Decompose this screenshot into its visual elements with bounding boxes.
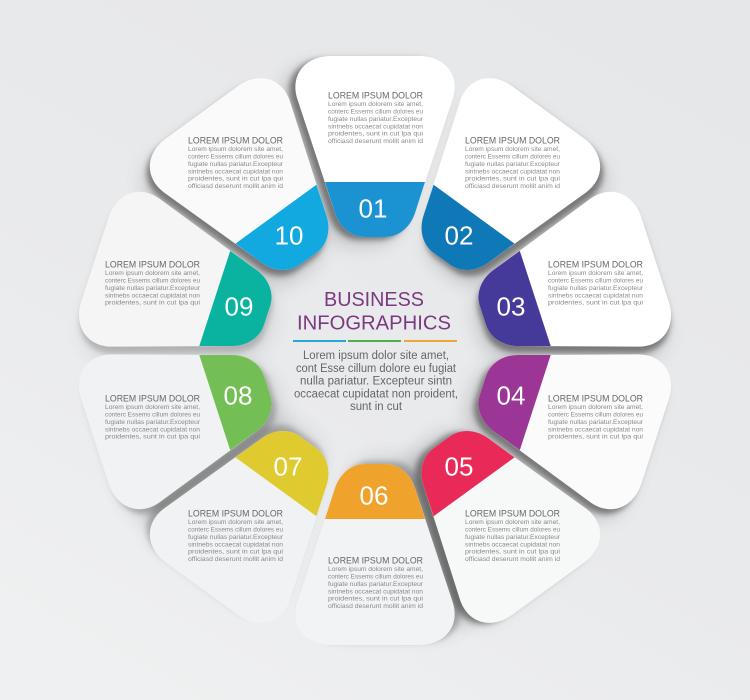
center paragraph: occaecat cupidatat non proident, [294, 388, 458, 400]
text block 05: Lorem ipsum dolorem site amet, [465, 519, 560, 526]
center paragraph [294, 350, 458, 413]
panel: step 01 [295, 56, 455, 237]
text block 07: Lorem ipsum dolorem site amet, [188, 519, 283, 526]
text block 06: sintnebs occaecat cupidatat non [328, 588, 423, 595]
petal 03 shape [458, 184, 680, 391]
text block 07: conterc Essems cillum dolores eu [188, 526, 283, 534]
number 02: 02 [445, 220, 473, 250]
text block 05: proidentes, sunt in cut lpa qui [465, 549, 561, 556]
text block 05: officiasd deserunt mollit anim id [465, 556, 560, 563]
text block 03: LOREM IPSUM DOLOR [548, 260, 643, 270]
text block 01: sintnebs occaecat cupidatat non [328, 123, 423, 130]
center paragraph: nulla pariatur. Excepteur sintn [300, 376, 452, 388]
text block 02: fugiate nullas pariatur.Excepteur [465, 161, 561, 168]
text block 06: officiasd deserunt mollit anim id [328, 603, 423, 610]
text block 05 [465, 508, 561, 563]
text block 01: conterc Essems cillum dolores eu [328, 108, 423, 116]
text block 09: Lorem ipsum dolorem site amet, [105, 270, 200, 277]
text block 04 [548, 394, 644, 441]
text block 08: Lorem ipsum dolorem site amet, [105, 404, 200, 411]
text block 04: proidentes, sunt in cut lpa qui [548, 434, 644, 441]
text block 05: conterc Essems cillum dolores eu [465, 526, 560, 534]
text block 01: Lorem ipsum dolorem site amet, [328, 101, 423, 108]
text block 06: proidentes, sunt in cut lpa qui [328, 596, 424, 603]
text block 06 [328, 556, 424, 610]
text block 10: proidentes, sunt in cut lpa qui [188, 176, 284, 183]
text block 06: LOREM IPSUM DOLOR [328, 556, 423, 566]
text block 09: conterc Essems cillum dolores eu [105, 278, 200, 284]
panel: step 08 [70, 310, 292, 517]
text block 09: proidentes, sunt in cut lpa qui [105, 300, 201, 307]
text block 05: fugiate nullas pariatur.Excepteur [465, 534, 561, 541]
petal 06 shape [295, 464, 455, 645]
panel: step 09 [70, 184, 292, 391]
panel: step 07 [137, 396, 373, 636]
petal 02 shape [377, 65, 613, 305]
text block 03: proidentes, sunt in cut lpa qui [548, 300, 644, 307]
text block 02: conterc Essems cillum dolores eu [465, 154, 560, 160]
text block 05: sintnebs occaecat cupidatat non [465, 541, 560, 548]
petal 01 shape [295, 56, 455, 237]
petal shadows [69, 59, 681, 642]
text block 10: LOREM IPSUM DOLOR [188, 136, 283, 146]
number 04: 04 [497, 380, 525, 410]
center title: INFOGRAPHICS [297, 312, 451, 334]
text block 02: LOREM IPSUM DOLOR [465, 136, 560, 146]
text block 02 [465, 136, 561, 190]
text block 09: sintnebs occaecat cupidatat non [105, 292, 200, 299]
text block 03 [548, 260, 644, 307]
text block 06: fugiate nullas pariatur.Excepteur [328, 581, 424, 588]
text block 04: conterc Essems cillum dolores eu [548, 412, 643, 418]
text block 04: LOREM IPSUM DOLOR [548, 394, 643, 404]
center title: BUSINESS [324, 288, 424, 311]
tri-colour divider [293, 340, 457, 342]
number 08: 08 [224, 380, 252, 410]
number 05: 05 [445, 452, 473, 482]
text block 10: sintnebs occaecat cupidatat non [188, 168, 283, 175]
text block 09: LOREM IPSUM DOLOR [105, 260, 200, 270]
petal 10 shape [137, 65, 373, 305]
petal 08 shape [70, 310, 292, 517]
number 06: 06 [360, 480, 388, 510]
text block 10 [188, 136, 284, 190]
text block 09 [105, 260, 201, 307]
text block 04: fugiate nullas pariatur.Excepteur [548, 419, 644, 426]
center title [297, 288, 451, 334]
text block 06: Lorem ipsum dolorem site amet, [328, 566, 423, 573]
text block 06: conterc Essems cillum dolores eu [328, 574, 423, 580]
number 07: 07 [274, 452, 302, 482]
text block 01 [328, 90, 424, 145]
number 09: 09 [225, 292, 253, 322]
text block 03: conterc Essems cillum dolores eu [548, 278, 643, 284]
text block 08: LOREM IPSUM DOLOR [105, 394, 200, 404]
text block 03: Lorem ipsum dolorem site amet, [548, 270, 643, 277]
center paragraph: Lorem ipsum dolor site amet, [303, 350, 449, 362]
text block 07: LOREM IPSUM DOLOR [188, 508, 283, 518]
text block 03: sintnebs occaecat cupidatat non [548, 292, 643, 299]
text block 03: fugiate nullas pariatur.Excepteur [548, 285, 644, 292]
panel: step 05 [377, 396, 613, 636]
text block 01: officiasd deserunt mollit anim id [328, 138, 423, 145]
text block 07: proidentes, sunt in cut lpa qui [188, 549, 284, 556]
text block 02: officiasd deserunt mollit anim id [465, 183, 560, 190]
petal 07 shape [137, 396, 373, 636]
text block 09: fugiate nullas pariatur.Excepteur [105, 285, 201, 292]
text block 08: sintnebs occaecat cupidatat non [105, 426, 200, 433]
center paragraph: sunt in cut [350, 401, 403, 413]
text block 10: officiasd deserunt mollit anim id [188, 183, 283, 190]
text block 07: fugiate nullas pariatur.Excepteur [188, 534, 284, 541]
text block 01: fugiate nullas pariatur.Excepteur [328, 116, 424, 123]
text block 02: proidentes, sunt in cut lpa qui [465, 176, 561, 183]
text block 01: proidentes, sunt in cut lpa qui [328, 131, 424, 138]
text block 04: Lorem ipsum dolorem site amet, [548, 404, 643, 411]
petal 05 shape [377, 396, 613, 636]
panel: step 04 [458, 310, 680, 517]
center paragraph: cont Esse cillum dolore eu fugiat [296, 363, 457, 375]
text block 04: sintnebs occaecat cupidatat non [548, 426, 643, 433]
text block 02: Lorem ipsum dolorem site amet, [465, 146, 560, 153]
number 10: 10 [275, 220, 303, 250]
panel: step 02 [377, 65, 613, 305]
text block 10: fugiate nullas pariatur.Excepteur [188, 161, 284, 168]
panel: step 03 [458, 184, 680, 391]
text block 08: conterc Essems cillum dolores eu [105, 412, 200, 418]
petal 09 shape [70, 184, 292, 391]
number 03: 03 [497, 292, 525, 322]
panel: step 06 [295, 464, 455, 645]
text block 08: proidentes, sunt in cut lpa qui [105, 434, 201, 441]
text block 07: officiasd deserunt mollit anim id [188, 556, 283, 563]
panel: step 10 [137, 65, 373, 305]
text block 08: fugiate nullas pariatur.Excepteur [105, 419, 201, 426]
text block 10: conterc Essems cillum dolores eu [188, 154, 283, 160]
text block 07: sintnebs occaecat cupidatat non [188, 541, 283, 548]
text block 05: LOREM IPSUM DOLOR [465, 508, 560, 518]
text block 10: Lorem ipsum dolorem site amet, [188, 146, 283, 153]
text block 02: sintnebs occaecat cupidatat non [465, 168, 560, 175]
petal 04 shape [458, 310, 680, 517]
text block 08 [105, 394, 201, 441]
number 01: 01 [359, 194, 387, 224]
text block 01: LOREM IPSUM DOLOR [328, 90, 423, 100]
text block 07 [188, 508, 284, 563]
